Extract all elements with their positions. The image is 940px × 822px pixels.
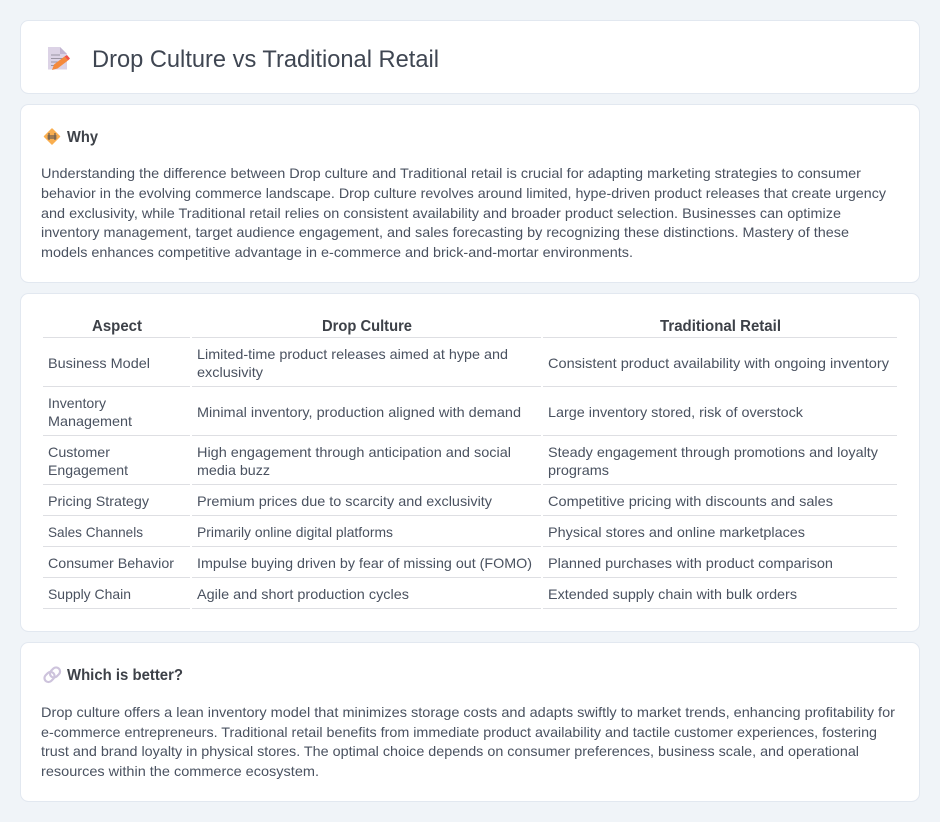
text block: verdict paragraph: e-commerce entrepreneurs. Traditional retail benefits from immediate product availability and tactile customer experiences, fostering xyxy=(41,724,877,740)
row: consumer behavior xyxy=(48,555,833,571)
row: business model xyxy=(48,346,889,380)
text block: why paragraph: Understanding the difference between Drop culture and Traditional retail is crucial for adapting marketing strategies to consumer xyxy=(41,165,861,181)
row: customer engagement: media buzz xyxy=(197,462,270,478)
text block: why paragraph: behavior in the evolving commerce landscape. Drop culture revolves around limited, hype-driven product releases that create urgency xyxy=(41,185,886,201)
text block: why paragraph: inventory management, target audience engagement, and sales forecasting by recognizing these distinctions. Mastery of these xyxy=(41,224,849,240)
panel: header xyxy=(20,20,920,94)
panel: why xyxy=(20,104,920,282)
row: sales channels xyxy=(48,524,805,540)
row: inventory management: Minimal inventory, production aligned with demand xyxy=(197,404,521,420)
row: inventory management: Management xyxy=(48,413,132,429)
row: business model: Business Model xyxy=(48,355,150,371)
text block: verdict paragraph xyxy=(41,704,895,779)
table header row: Aspect xyxy=(92,318,143,335)
row: customer engagement: Steady engagement through promotions and loyalty xyxy=(548,444,878,460)
text block: verdict paragraph: Drop culture offers a lean inventory model that minimizes storage costs and adapts swiftly to market trends, enhancing profitability for xyxy=(41,704,895,720)
text block: why paragraph: and exclusivity, while Traditional retail relies on consistent availability and broader product selection. Businesses can optimize xyxy=(41,205,841,221)
row: customer engagement xyxy=(48,444,878,478)
table header row: Traditional Retail xyxy=(660,318,781,335)
panel: which is better xyxy=(20,642,920,802)
row: pricing strategy: Pricing Strategy xyxy=(48,493,149,509)
text block: verdict paragraph: trust and brand loyalty in physical stores. The optimal choice depends on consumer preferences, business scale, and operational xyxy=(41,743,859,759)
row: inventory management: Inventory xyxy=(48,395,106,411)
row: business model: Consistent product availability with ongoing inventory xyxy=(548,355,889,371)
row: pricing strategy xyxy=(48,493,833,509)
row: customer engagement: programs xyxy=(548,462,609,478)
title: Drop Culture vs Traditional Retail xyxy=(92,46,439,73)
icon: link xyxy=(43,666,62,684)
heading: which is better: Which is better? xyxy=(67,667,183,684)
row: sales channels: Sales Channels xyxy=(48,524,143,540)
row: consumer behavior: Planned purchases with product comparison xyxy=(548,555,833,571)
row: pricing strategy: Competitive pricing with discounts and sales xyxy=(548,493,833,509)
row: business model: exclusivity xyxy=(197,364,263,380)
row: supply chain xyxy=(48,586,797,602)
text block: why paragraph: models enhances competitive advantage in e-commerce and brick-and-mortar environments. xyxy=(41,244,633,260)
row: consumer behavior: Consumer Behavior xyxy=(48,555,174,571)
row: sales channels: Primarily online digital platforms xyxy=(197,524,393,540)
text block: verdict paragraph: resources within the commerce ecosystem. xyxy=(41,763,319,779)
panel: comparison table xyxy=(20,294,920,632)
row: sales channels: Physical stores and online marketplaces xyxy=(548,524,805,540)
row: consumer behavior: Impulse buying driven by fear of missing out (FOMO) xyxy=(197,555,532,571)
row: business model: Limited-time product releases aimed at hype and xyxy=(197,346,508,362)
row: inventory management xyxy=(48,395,804,429)
table header row: Drop Culture xyxy=(322,318,412,335)
row: supply chain: Extended supply chain with bulk orders xyxy=(548,586,797,602)
row: supply chain: Supply Chain xyxy=(48,586,131,602)
text block: why paragraph xyxy=(41,165,886,260)
row: supply chain: Agile and short production cycles xyxy=(197,586,409,602)
row: customer engagement: Engagement xyxy=(48,462,128,478)
icon: document with pencil xyxy=(48,47,70,70)
row: customer engagement: High engagement through anticipation and social xyxy=(197,444,511,460)
icon: diamond road sign xyxy=(44,129,60,144)
row: pricing strategy: Premium prices due to scarcity and exclusivity xyxy=(197,493,492,509)
table header row xyxy=(92,318,781,335)
row: inventory management: Large inventory stored, risk of overstock xyxy=(548,404,804,420)
row: customer engagement: Customer xyxy=(48,444,110,460)
heading: why: Why xyxy=(67,129,98,146)
